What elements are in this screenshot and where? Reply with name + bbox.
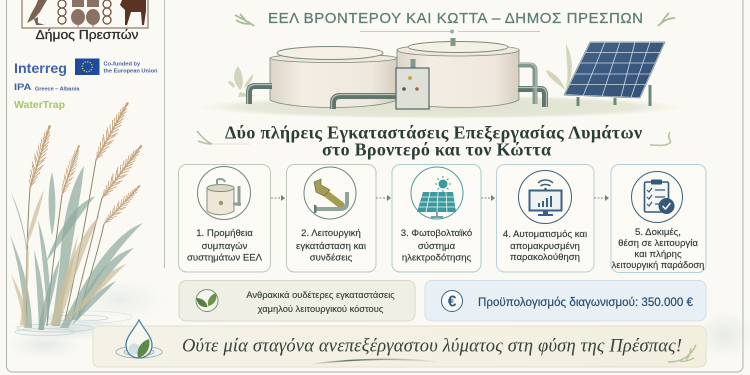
reed stems: [27, 160, 104, 326]
solar panel: [564, 42, 665, 106]
logo: EU flag: [75, 58, 100, 75]
tank 2: [397, 42, 519, 108]
label: [612, 227, 704, 270]
municipality crest: [22, 0, 148, 28]
card 4: automation: [496, 164, 594, 272]
label: σύστημα: [418, 241, 456, 252]
label: [401, 228, 472, 264]
tank 1: [270, 46, 397, 108]
logo: Greece Albania: Greece – Albania: [35, 86, 80, 92]
icon: monitor and wifi: [518, 170, 572, 224]
water ripples: [15, 311, 132, 336]
label: συνδέσεις: [310, 252, 353, 264]
label: απομακρυσμένη: [510, 241, 580, 252]
icon: euro: €: [448, 294, 457, 310]
label: [503, 229, 587, 263]
icon: water drop: [116, 320, 162, 358]
partner logos: [14, 58, 158, 111]
arrow 3: [481, 195, 495, 201]
icon: compact unit: [198, 166, 250, 220]
label: 2. Λειτουργική: [301, 228, 361, 239]
label: παρακολούθηση: [510, 252, 580, 263]
label: συμπαγών: [202, 241, 248, 252]
label: 5. Δοκιμές,: [635, 227, 681, 238]
water wash: [5, 278, 168, 359]
heading: Δύο πλήρεις Εγκαταστάσεις Επεξεργασίας Λυμάτων: [225, 122, 642, 144]
illustration: wastewater plant: [196, 38, 686, 119]
title sprigs and rule: [235, 13, 675, 34]
municipality name: Δήμος Πρεσπών: [36, 28, 138, 42]
crest horse: [120, 0, 146, 25]
card 2: installation: [286, 164, 376, 272]
heading: στο Βροντερό και τον Κώττα: [322, 140, 551, 160]
reeds illustration: [5, 99, 168, 359]
heading: [225, 122, 642, 160]
icon: checklist: [632, 172, 682, 222]
label: εγκατάσταση και: [296, 241, 366, 252]
control box: [396, 68, 429, 109]
arrow 1: [271, 195, 285, 201]
reed leaves: [10, 166, 143, 330]
icon: solar panel and sun: [411, 167, 463, 219]
card 1: procurement: [178, 164, 270, 272]
brush underline: [312, 359, 440, 364]
label: λειτουργική παράδοση: [612, 260, 704, 270]
callout text: Ανθρακικά ουδέτερες εγκαταστάσεις: [246, 290, 395, 300]
budget text: Προϋπολογισμός διαγωνισμού: 350.000 €: [478, 295, 693, 309]
logo: Interreg: Interreg: [14, 61, 67, 76]
crest rings: [58, 0, 111, 24]
reed plumes: [24, 99, 147, 227]
title: ΕΕΛ ΒΡΟΝΤΕΡΟΥ ΚΑΙ ΚΩΤΤΑ – ΔΗΜΟΣ ΠΡΕΣΠΩΝ: [268, 10, 643, 27]
logo: co-funded text: [104, 62, 158, 74]
logo: IPA: IPA: [14, 82, 32, 93]
icon: euro: [442, 290, 462, 312]
crest trees: [71, 0, 100, 27]
label: ηλεκτροδότησης: [402, 252, 472, 264]
callout text: χαμηλού λειτουργικού κόστους: [258, 304, 384, 314]
label: και πλήρης: [634, 249, 682, 260]
mist corner: [693, 311, 750, 359]
label: 1. Προμήθεια: [196, 228, 253, 239]
logo: co-funded text: Co-funded by: [104, 62, 141, 68]
label: [187, 228, 263, 264]
logo: co-funded text: the European Union: [104, 68, 158, 74]
label: [296, 228, 366, 264]
heading sprigs: [197, 131, 671, 145]
label: θέση σε λειτουργία: [618, 238, 698, 249]
crest bird: [27, 0, 47, 25]
slogan: Ούτε μία σταγόνα ανεπεξέργαστου λύματος στη φύση της Πρέσπας!: [182, 336, 682, 356]
card 5: testing: [611, 164, 706, 272]
icon: wrench and pipe: [304, 167, 356, 219]
card 3: photovoltaics: [392, 164, 481, 272]
plants: [228, 44, 582, 97]
callout: budget: [425, 280, 706, 321]
icon: leaves: [196, 290, 218, 312]
slogan banner: [93, 320, 706, 367]
pipes: [248, 38, 546, 109]
label: συστημάτων ΕΕΛ: [187, 252, 263, 264]
arrow 4: [594, 195, 609, 201]
label: 3. Φωτοβολταϊκό: [401, 228, 472, 239]
callout text: [246, 290, 395, 314]
sprig: [668, 345, 696, 362]
ground: [196, 95, 686, 119]
label: 4. Αυτοματισμός και: [503, 229, 587, 240]
callout: carbon neutral: [179, 280, 415, 321]
logo: WaterTrap: WaterTrap: [14, 100, 65, 111]
arrow 2: [376, 195, 391, 201]
